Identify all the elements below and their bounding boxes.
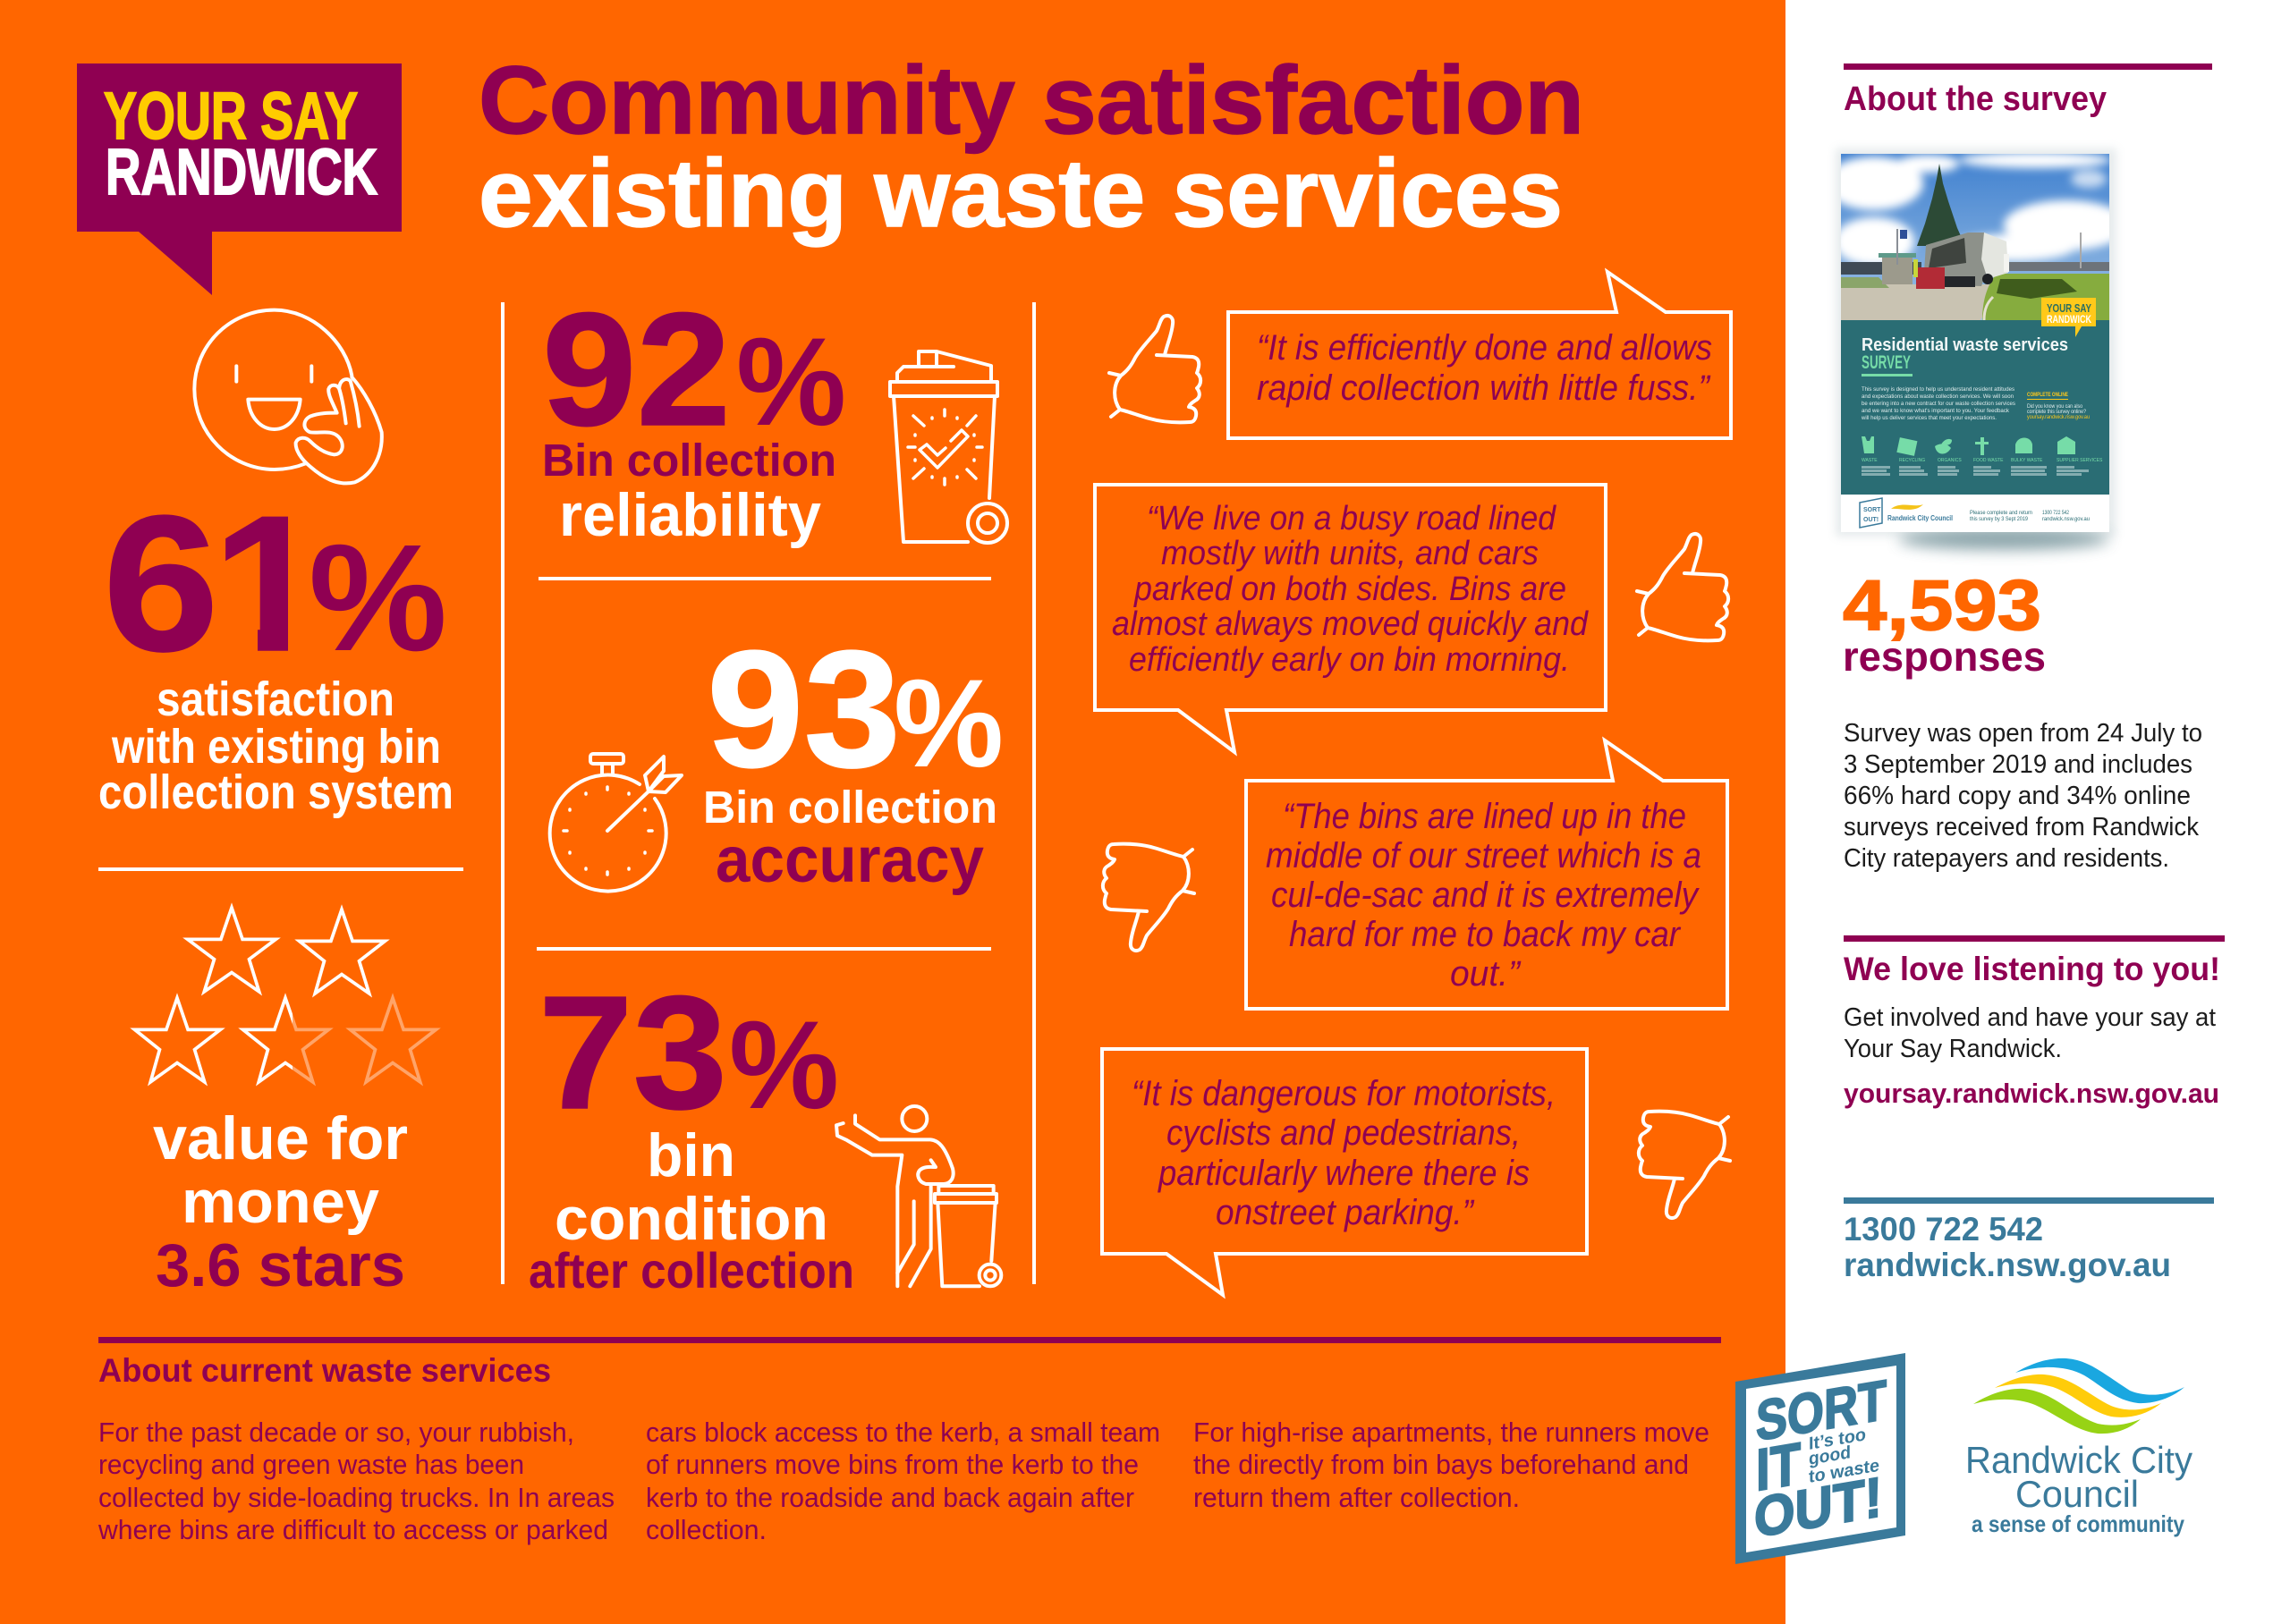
stat: 92% bin collection reliability: reliability (559, 481, 821, 549)
text: phone and website: randwick.nsw.gov.au (1844, 1247, 2171, 1283)
callout: quote busy road: parked on both sides. Bins are (1133, 571, 1566, 608)
stat: 73% bin condition after collection: bin (647, 1121, 735, 1189)
icon: thumbs down (1639, 1112, 1730, 1218)
survey poster thumbnail: SUPPLIER SERVICES (2057, 458, 2103, 463)
survey poster thumbnail: complete this survey online? (2027, 410, 2087, 415)
survey poster thumbnail: 1300 722 542 (2042, 511, 2070, 516)
stat: 93% bin collection accuracy (703, 617, 1004, 896)
text: survey description: City ratepayers and residents. (1844, 844, 2169, 873)
text: phone and website: 1300 722 542 (1844, 1211, 2043, 1248)
callout: quote busy road: efficiently early on bin morning. (1129, 641, 1570, 679)
logo: Sort It Out: to waste (1809, 1456, 1879, 1487)
icon: thumbs up (1109, 316, 1200, 422)
stat: 73% bin condition after collection: 73 (539, 963, 727, 1143)
survey poster thumbnail: and expectations about waste collection services. We will soon (1862, 393, 2014, 400)
panel: about the survey sidebar (1825, 63, 2212, 873)
logo: Randwick City Council: Randwick City (1965, 1439, 2192, 1481)
logo: Randwick City Council: Council (2015, 1473, 2139, 1515)
stat: 4,593 responses: responses (1843, 633, 2046, 680)
logo: Sort It Out: IT (1756, 1431, 1801, 1504)
text column 2: collection. (646, 1514, 767, 1545)
stat: 73% bin condition after collection: % (729, 994, 839, 1135)
text: get involved (1844, 1003, 2216, 1063)
title: existing waste services (479, 139, 1563, 247)
heading: we love listening: We love listening to you! (1844, 951, 2220, 987)
logo: Sort It Out: It’s too (1809, 1425, 1866, 1454)
stat: 92% bin collection reliability: % (736, 311, 846, 452)
survey poster thumbnail: BULKY WASTE (2011, 458, 2043, 463)
text: get involved: Your Say Randwick. (1844, 1035, 2062, 1063)
stat: 92% bin collection reliability: Bin collection (542, 435, 836, 486)
icon: thumbs up (1637, 534, 1728, 640)
stat: 92% bin collection reliability (542, 280, 846, 549)
survey poster thumbnail: Did you know you can also (2027, 404, 2083, 410)
survey poster thumbnail: yoursay.randwick.nsw.gov.au (2027, 415, 2090, 420)
survey poster thumbnail: RANDWICK (2047, 313, 2091, 326)
panel: overall satisfaction (98, 310, 463, 1299)
text column 3: For high-rise apartments, the runners move (1193, 1417, 1709, 1448)
survey poster thumbnail: randwick.nsw.gov.au (2042, 517, 2090, 522)
stat: 61%: 61 (103, 475, 328, 691)
survey poster thumbnail: OUT! (1863, 517, 1879, 523)
stat: value for money 3.6 stars: 3.6 stars (156, 1231, 405, 1299)
callout: quote busy road: “We live on a busy road lined (1147, 500, 1557, 537)
survey poster thumbnail: this survey by 3 Sept 2019 (1970, 517, 2029, 522)
text: survey description: 3 September 2019 and includes (1844, 750, 2192, 779)
logo: Sort It Out (1735, 1353, 1905, 1564)
stat caption: satisfaction: with existing bin (111, 720, 441, 774)
stat: 4,593 responses (1843, 565, 2046, 680)
callout: quote efficiently done (1228, 272, 1731, 438)
text column 1 (98, 1417, 615, 1545)
callout: quote dangerous: particularly where there is (1158, 1154, 1530, 1193)
icon: stopwatch with arrow (550, 754, 682, 892)
text column 3: return them after collection. (1193, 1482, 1520, 1513)
text column 3 (1193, 1417, 1709, 1513)
stat: 92% bin collection reliability: 92 (542, 280, 731, 460)
callout: quote dangerous: onstreet parking.” (1216, 1193, 1475, 1232)
stat: 61%: % (309, 513, 447, 683)
link: yoursay website: yoursay.randwick.nsw.gov.au (1844, 1078, 2219, 1109)
stat: 93% bin collection accuracy: 93 (707, 617, 901, 802)
callout: quote dangerous: cyclists and pedestrians, (1166, 1113, 1521, 1153)
callout: quote dangerous: “It is dangerous for motorists, (1132, 1074, 1556, 1113)
callout: quote cul-de-sac: middle of our street which is a (1266, 836, 1701, 875)
icon: person placing bin (836, 1106, 1001, 1286)
survey poster thumbnail: This survey is designed to help us understand resident attitudes (1862, 386, 2015, 393)
text: survey description: Survey was open from 24 July to (1844, 719, 2202, 748)
logo: Your Say Randwick speech bubble (77, 63, 402, 295)
stat: value for money 3.6 stars: value for (153, 1104, 408, 1172)
text column 1: For the past decade or so, your rubbish, (98, 1417, 574, 1448)
logo: Randwick City Council (1965, 1358, 2192, 1537)
callout: quote cul-de-sac (1246, 740, 1727, 1009)
survey poster thumbnail: RECYCLING (1899, 458, 1925, 463)
logo: Sort It Out: SORT (1756, 1369, 1887, 1453)
title: Community satisfaction (479, 46, 1584, 154)
text column 2 (646, 1417, 1160, 1545)
text: survey description: 66% hard copy and 34% online (1844, 782, 2191, 810)
stat caption: satisfaction (98, 672, 454, 819)
stat: 93% bin collection accuracy: accuracy (716, 825, 984, 896)
panel: we love listening to you (1844, 935, 2225, 1109)
text: survey description (1844, 719, 2202, 873)
survey poster thumbnail: and we want to know what's important to you. Your feedback (1862, 408, 2010, 414)
logo: Your Say Randwick speech bubble: RANDWICK (106, 137, 377, 208)
text column 2: kerb to the roadside and back again after (646, 1482, 1134, 1513)
stat: 93% bin collection accuracy: Bin collection (703, 782, 997, 833)
callout: quote cul-de-sac: cul-de-sac and it is extremely (1271, 875, 1701, 915)
text: get involved: Get involved and have your say at (1844, 1003, 2216, 1032)
survey poster thumbnail: FOOD WASTE (1973, 458, 2004, 463)
stat: value for money 3.6 stars (153, 1104, 408, 1299)
logo: Your Say Randwick speech bubble: YOUR SAY (104, 79, 358, 153)
text column 2: of runners move bins from the kerb to the (646, 1449, 1139, 1480)
icon: five stars rating (135, 908, 436, 1082)
stat: 73% bin condition after collection (529, 963, 854, 1298)
text: phone and website (1844, 1211, 2171, 1283)
callout: quote efficiently done: “It is efficiently done and allows (1257, 328, 1712, 368)
survey poster thumbnail: will help us deliver services that meet your expectations. (1861, 415, 1997, 421)
callout: quote busy road (1095, 485, 1606, 752)
survey poster thumbnail: Randwick City Council (1887, 514, 1953, 522)
survey poster thumbnail: SORT (1863, 507, 1881, 513)
survey poster thumbnail: ORGANICS (1938, 458, 1962, 463)
callout: quote efficiently done: rapid collection with little fuss.” (1257, 368, 1711, 408)
icon: smiling face with OK hand (194, 310, 382, 483)
callout: quote dangerous (1102, 1049, 1587, 1295)
logo: Randwick City Council: a sense of community (1972, 1510, 2184, 1537)
stat: 93% bin collection accuracy: % (894, 653, 1004, 793)
logo: Sort It Out: OUT! (1754, 1466, 1882, 1550)
stat: value for money 3.6 stars: money (182, 1168, 379, 1236)
stat: 4,593 responses: 4,593 (1843, 565, 2041, 645)
callout: quote cul-de-sac: out.” (1450, 954, 1522, 994)
text column 1: collected by side-loading trucks. In In areas (98, 1482, 615, 1513)
heading: about current waste services: About current waste services (98, 1352, 551, 1389)
survey poster thumbnail: be entering into a new contract for our waste collection services (1862, 401, 2016, 407)
text column 3: the directly from bin bays beforehand and (1193, 1449, 1689, 1480)
panel: resident quotes (1095, 272, 1731, 1295)
callout: quote busy road: almost always moved quickly and (1112, 605, 1590, 643)
panel: about current waste services (98, 1337, 1721, 1545)
survey poster thumbnail (1825, 148, 2129, 550)
survey poster thumbnail: WASTE (1862, 458, 1878, 463)
heading: about the survey: About the survey (1844, 80, 2107, 118)
survey poster thumbnail: SURVEY (1862, 352, 1911, 373)
stat: 73% bin condition after collection: condition (555, 1185, 828, 1253)
panel: contact details (1844, 1197, 2214, 1283)
callout: quote cul-de-sac: “The bins are lined up in the (1283, 797, 1686, 836)
panel: service ratings (529, 280, 1007, 1298)
orange background panel (0, 0, 1785, 1624)
text column 1: where bins are difficult to access or parked (98, 1514, 608, 1545)
survey poster thumbnail: Residential waste services (1862, 335, 2068, 355)
survey poster thumbnail: Please complete and return (1970, 511, 2032, 516)
text column 2: cars block access to the kerb, a small team (646, 1417, 1160, 1448)
survey poster thumbnail: YOUR SAY (2047, 301, 2091, 315)
text column 1: recycling and green waste has been (98, 1449, 524, 1480)
icon: wheelie bin with clock and tick (890, 351, 1007, 543)
callout: quote busy road: mostly with units, and cars (1161, 535, 1539, 572)
title (479, 46, 1584, 247)
stat caption: satisfaction: collection system (98, 765, 454, 819)
stat caption: satisfaction: satisfaction (157, 672, 394, 726)
logo: Sort It Out: good (1809, 1442, 1851, 1469)
survey poster thumbnail: COMPLETE ONLINE (2027, 393, 2068, 398)
text: survey description: surveys received from Randwick (1844, 813, 2199, 842)
stat: 73% bin condition after collection: after collection (529, 1242, 854, 1298)
callout: quote cul-de-sac: hard for me to back my car (1289, 915, 1682, 954)
stat: 61% (109, 514, 444, 653)
icon: thumbs down (1103, 844, 1194, 951)
